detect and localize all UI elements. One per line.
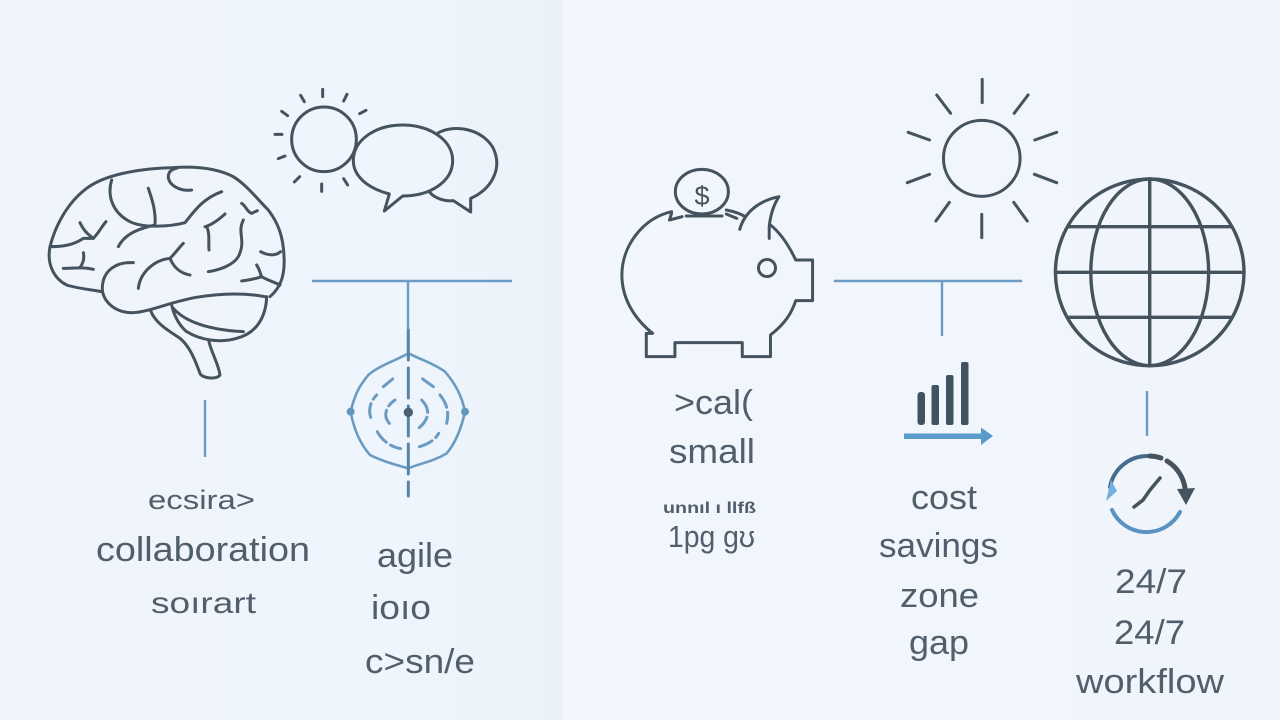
text: scale small column — [663, 384, 756, 554]
icon: brain — [49, 167, 284, 378]
text: agile column — [365, 537, 475, 681]
text: scale small column: small — [669, 433, 755, 471]
connector: brain stem line — [204, 400, 206, 457]
text: cost savings column — [879, 479, 998, 662]
panel: right — [622, 79, 1244, 701]
text: agile column: c>sn/e — [365, 643, 475, 681]
connector: left horizontal with stem — [312, 281, 512, 352]
icon: piggy eye — [758, 260, 776, 276]
icon: clock cycle — [1106, 456, 1195, 532]
text: workflow column: workflow — [1075, 663, 1224, 701]
connector: globe stem line — [1146, 391, 1148, 436]
text: cost savings column: savings — [879, 527, 998, 565]
text: agile column: agile — [377, 537, 453, 575]
icon: small sun — [275, 89, 366, 191]
text: collaboration column: soırart — [151, 587, 257, 620]
text: scale small column: >cal( — [674, 384, 754, 422]
icon: piggy bank — [622, 169, 813, 357]
text: cost savings column: gap — [909, 624, 969, 662]
icon: bar chart with arrow — [904, 362, 993, 445]
text: collaboration column: ecsira> — [148, 485, 255, 515]
icon: speech bubbles — [353, 125, 497, 212]
text: workflow column — [1075, 563, 1224, 701]
text: cost savings column: cost — [911, 479, 978, 517]
text: scale small column: 1pg gʊ — [668, 519, 755, 554]
connector: right horizontal with stem — [834, 281, 1022, 336]
text: workflow column: 24/7 — [1115, 563, 1187, 601]
text: collaboration column: collaboration — [96, 531, 310, 569]
text: scale small column: unnıl ı llfß — [663, 500, 756, 517]
panel: left — [49, 89, 512, 681]
text: agile column: ioıo — [371, 589, 431, 627]
icon: agile target — [347, 330, 469, 496]
text: workflow column: 24/7 — [1114, 614, 1185, 652]
icon: dollar sign on coin: $ — [694, 181, 710, 211]
text: collaboration column — [96, 485, 310, 620]
icon: globe — [1055, 179, 1244, 366]
text: cost savings column: zone — [900, 577, 979, 615]
icon: large sun — [907, 79, 1057, 238]
